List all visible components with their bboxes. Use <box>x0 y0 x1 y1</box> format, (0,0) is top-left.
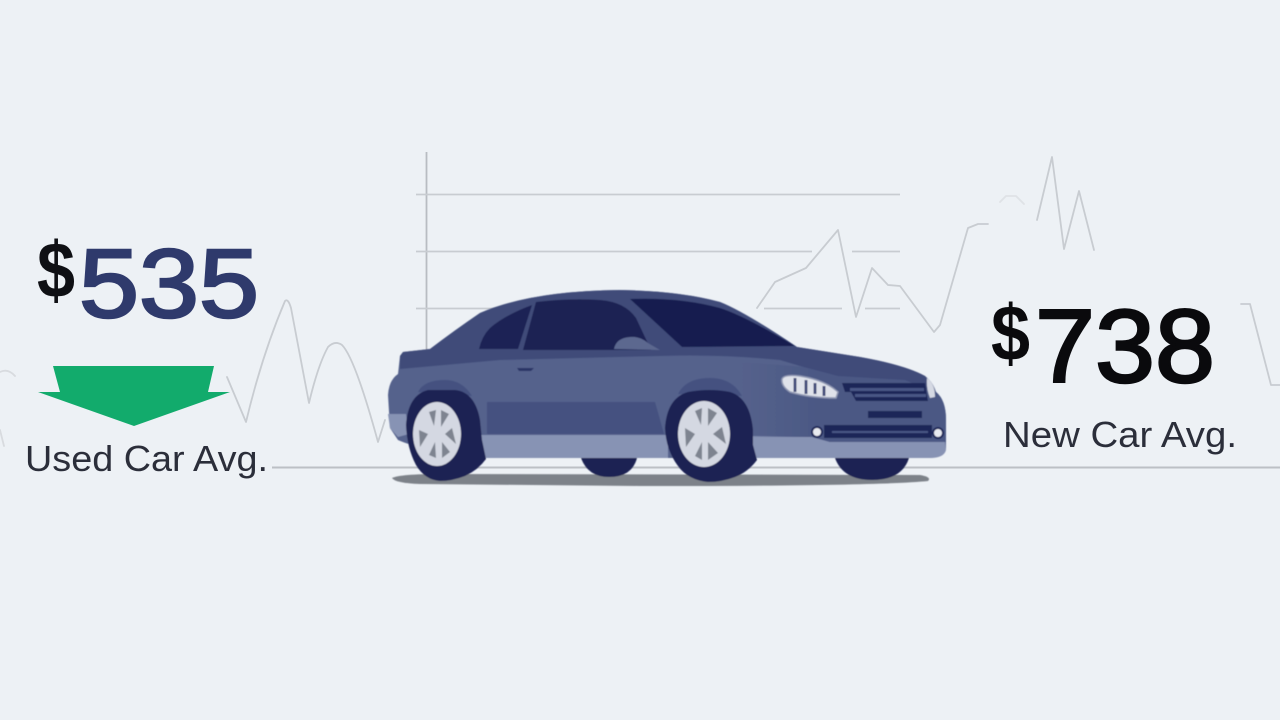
grille <box>824 383 932 438</box>
headlight <box>782 375 838 398</box>
lower side panel <box>487 402 664 434</box>
wheel arch trim <box>418 378 742 396</box>
far wheels <box>581 458 909 480</box>
dollar sign: $ <box>37 225 75 314</box>
new price: 738 <box>1035 289 1215 405</box>
icon: green down arrow <box>38 366 230 426</box>
front fascia <box>740 362 946 442</box>
side mirror <box>614 337 660 350</box>
price trend line <box>0 157 1280 446</box>
front corner light <box>927 378 935 398</box>
front wheel <box>665 390 757 482</box>
ground shadow <box>392 474 929 486</box>
used car label: Used Car Avg. <box>25 438 268 479</box>
door handle <box>517 368 534 371</box>
hood and shoulder <box>400 290 934 392</box>
dollar sign: $ <box>991 288 1030 377</box>
chart grid <box>416 152 900 350</box>
windshield <box>630 299 795 347</box>
rear window <box>479 305 532 349</box>
car body <box>388 290 946 458</box>
rocker panel <box>479 435 668 458</box>
used car average: price <box>37 225 259 338</box>
used price: 535 <box>79 229 259 338</box>
new car label: New Car Avg. <box>1003 414 1237 455</box>
new car average: price <box>991 288 1215 405</box>
side window <box>523 299 651 350</box>
grille highlights <box>832 388 928 433</box>
car illustration <box>388 290 946 486</box>
baseline <box>272 466 1280 468</box>
rear wheel <box>406 390 486 481</box>
rear bumper stripe <box>388 414 409 437</box>
front bumper <box>750 436 946 458</box>
fog lights <box>812 427 943 438</box>
